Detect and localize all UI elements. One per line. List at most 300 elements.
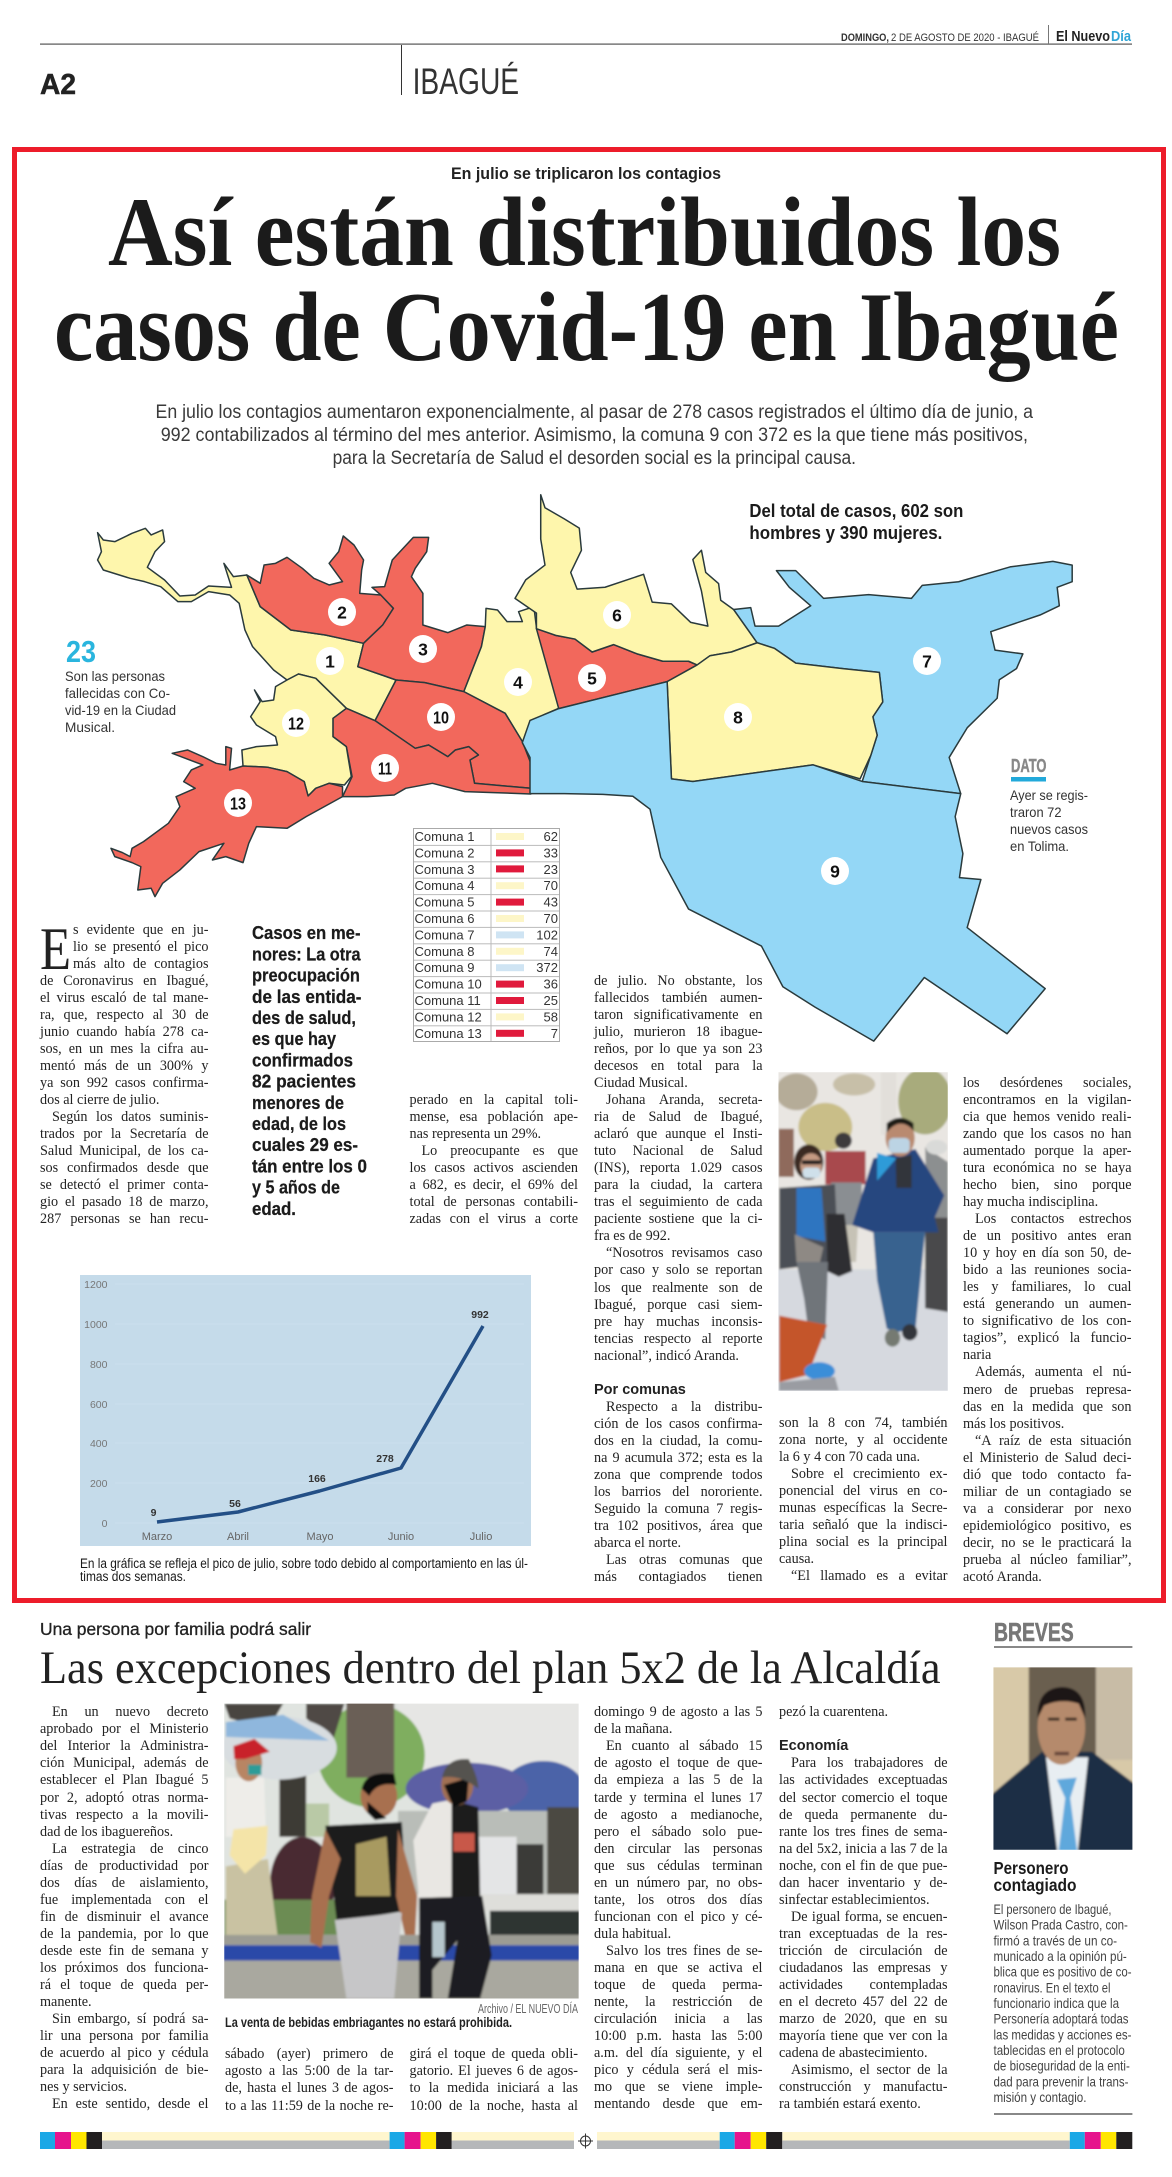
second article text: column 4: circulación inicia a las [594,2011,762,2027]
callout: dato: traron 72 [1010,804,1062,820]
comuna 4 [464,607,559,742]
panel: breves sidebar [990,1617,1136,2115]
second article text: column 1: rá el toque de queda per- [40,1977,208,1993]
second article text: column 1: por 2, adoptó otras norma- [40,1790,208,1806]
second article text: column 4: mo que se viene imple- [594,2079,762,2095]
drop cap: E [40,916,71,982]
comuna 2 [247,536,393,643]
section name: IBAGUÉ [413,61,519,102]
brief text: Personería adoptará todas [994,2011,1128,2027]
pull quote: cases in minors: de las entida- [252,986,362,1007]
article text: column 5: prueba al núcleo familiar”, [963,1552,1132,1568]
second article text: column 1: Sin embargo, sí podrá sa- [52,2011,208,2027]
second article text: column 1: manente. [40,1994,92,2010]
article text: column 4: Sobre el crecimiento ex- [791,1466,948,1482]
foreground seated person [779,1316,827,1382]
x axis labels: Marzo [142,1531,172,1543]
second article text: column 5: las actividades exceptuadas [779,1772,948,1788]
second article text: column 5: actividades contempladas [779,1977,948,1993]
data labels: 992 [471,1309,489,1321]
article text: column 3: pre hay muchas inconsis- [594,1314,762,1330]
article text: column 3: de julio. No obstante, los [594,973,762,989]
breves heading: BREVES [994,1617,1074,1647]
article text: column 4: zona norte, y al occidente [779,1432,948,1448]
second article text: column 1: lir una persona por familia [40,2028,208,2044]
second article text: column 5: del sector comercio el toque [779,1790,948,1806]
article text: column 5: los desórdenes sociales, [963,1075,1132,1091]
brief text: blica que es positivo de co- [994,1964,1132,1980]
article text: column 5: 10 y hoy en día son 50, de- [963,1245,1132,1261]
brief text: misión y contagio. [994,2089,1086,2105]
pull quote: cases in minors: y 5 años de [252,1177,340,1198]
chart caption: timas dos semanas. [80,1569,186,1584]
brief heading [994,1858,1076,1895]
callout: dato: nuevos casos [1010,821,1088,837]
row: comuna 4: 70 [544,878,558,893]
comuna 5 [536,629,697,709]
chart caption: En la gráfica se refleja el pico de julio, sobre todo debido al comportamiento en las úl- [80,1556,528,1571]
comuna 8: 8 [733,708,743,728]
line chart: monthly cases [80,1275,531,1546]
article text: column 1: sos, en un mes la cifra au- [40,1041,208,1057]
second article text: column 1: fin de disminuir el avance [40,1909,208,1925]
row: comuna 10 [414,977,558,992]
pull quote: cases in minors: edad, de los [252,1113,346,1134]
data labels [151,1309,489,1519]
second article text: column 5: construcción y manufactu- [779,2079,948,2095]
row: comuna 2: 33 [544,845,558,860]
photo caption: La venta de bebidas embriagantes no estará prohibida. [225,2015,512,2030]
article text: column 5: zando que los casos no han [963,1126,1132,1142]
article text: column 3: ria de Salud de Ibagué, [594,1109,762,1125]
article text: column 1: Según los datos suminis- [52,1109,208,1125]
y axis labels: 800 [90,1359,108,1371]
second article text: column 3: girá el toque de queda obli- [410,2046,578,2062]
comuna 2: 2 [337,602,347,622]
headline: second article: Las excepciones dentro del plan 5x2 de la Alcaldía [40,1642,941,1694]
second article text: column 1: En un nuevo decreto [52,1704,208,1720]
article text: column 3: Por comunas [594,1382,686,1398]
comuna 11: 11 [378,758,392,778]
article text: column 3: reños, por lo que ya son 23 [594,1041,762,1057]
row: comuna 13: 7 [551,1026,558,1041]
callout: dato: Ayer se regis- [1010,787,1088,803]
second article text: column 5: rante los tres fines de sema- [779,1824,948,1840]
second article text: column 4: domingo 9 de agosto a las 5 [594,1704,762,1720]
second article text: column 4 [594,1704,762,2112]
article text: column 3: ción de los casos confirma- [594,1416,762,1432]
pull quote: cases in minors: preocupación [252,965,360,986]
second article text: column 4: Salvo los tres fines de se- [606,1943,762,1959]
brief text: Wilson Prada Castro, con- [994,1917,1128,1933]
pull quote: cases in minors: Casos en me- [252,922,360,943]
article text: column 1: ya son 992 casos confirma- [40,1075,208,1091]
article text: column 3: para la ciudad, la cartera [594,1177,762,1193]
second article text: column 1: dos días de aislamiento, [40,1875,208,1891]
y axis labels: 200 [90,1478,108,1490]
article text: column 4: son la 8 con 74, también [779,1415,948,1431]
brief text: tablecidas en el protocolo [994,2042,1125,2058]
newspaper logo: Día [1111,28,1132,45]
second article text: column 4: den circular las personas [594,1841,762,1857]
row: comuna 5: Comuna 5 [414,895,474,910]
article text: column 4: taria señaló que la indisci- [779,1517,948,1533]
brief text: dad para prevenir la trans- [994,2073,1129,2089]
second article text: column 2: agosto a las 5:00 de la tar- [225,2063,394,2079]
second article text: column 1: dad de los ibaguereños. [40,1824,173,1840]
callout: deaths in city [65,634,176,735]
article text: column 4: la 6 y 4 con 70 cada una. [779,1449,920,1465]
second article text: column 1: ción Municipal, además de [40,1755,208,1771]
row: comuna 5 [414,895,558,910]
second article text: column 4: nente, la restricción de [594,1994,762,2010]
comuna 13: 13 [230,794,246,814]
brief text: de bioseguridad de la enti- [994,2058,1130,2074]
row: comuna 10: 36 [544,977,558,992]
y axis labels [84,1279,108,1530]
second article text: column 4: funcionan con el pico y cé- [594,1909,762,1925]
comuna 9 [522,682,1045,1041]
row: comuna 7 [414,927,558,942]
second article text: column 1: tivas respecto a la movili- [40,1807,208,1823]
article text: column 4: munas específicas la Secre- [779,1500,948,1516]
article text: column 3: (INS), reporta 1.029 casos [594,1160,762,1176]
data labels: 166 [308,1473,326,1485]
article text: column 4: ponencial del virus en co- [779,1483,948,1499]
article text: column 4: “El llamado es a evitar [791,1568,948,1584]
second article text: column 4: de agosto a medianoche, [594,1807,762,1823]
row: comuna 4 [414,878,558,893]
article text: column 5: acotó Aranda. [963,1569,1042,1585]
article text: column 3: más contagiados tienen [594,1569,762,1585]
second article text: column 5: tricción de circulación de [779,1943,948,1959]
article text: column 3: por caso y solo se reportan [594,1262,762,1278]
article text: column 5: mero de pruebas represa- [963,1382,1132,1398]
article text: column 2: nas representa un 29%. [410,1126,541,1142]
date line [841,31,1039,44]
row: comuna 7: Comuna 7 [414,927,474,942]
page number: A2 [40,69,76,101]
second article text: column 5: marzo de 2020, que en su [779,2011,948,2027]
chart caption [80,1556,528,1584]
brief text: municado a la opinión pú- [994,1948,1127,1964]
article text: column 5: el Ministerio de Salud deci- [963,1450,1132,1466]
article text: column 3: taron significativamente en [594,1007,762,1023]
second article text: column 4: tarde y termina el lunes 17 [594,1790,762,1806]
pull quote: cases in minors [252,922,367,1219]
second article text: column 5: Economía [779,1738,848,1754]
article text: column 5: epidemiológico positivo, es [963,1518,1132,1534]
date line: 2 DE AGOSTO DE 2020 - IBAGUÉ [891,31,1039,44]
second article text: column 1: aprobado por el Ministerio [40,1721,208,1737]
article text: column 1: mentó más de un 300% y [40,1058,208,1074]
second article text: column 5: pezó la cuarentena. [779,1704,888,1720]
second article text: column 1: de acuerdo al pico y cédula [40,2045,208,2061]
row: comuna 5: 43 [544,895,558,910]
pull quote: cases in minors: menores de [252,1092,344,1113]
second article text: column 4: tante, los otros dos días [594,1892,762,1908]
second article text: column 1: La estrategia de cinco [52,1841,208,1857]
article text: column 1: de Coronavirus en Ibagué, [40,973,208,989]
wall [220,1935,582,1945]
callout: deaths in city: vid-19 en la Ciudad [65,702,176,718]
y axis labels: 1200 [84,1279,108,1291]
article text: column 5: das en la medida que son [963,1399,1132,1415]
row: comuna 7: 102 [536,927,558,942]
title: Así están distribuidos los [108,178,1061,287]
callout: deaths in city: Musical. [65,719,115,735]
article text: column 1: s evidente que en ju- [73,922,208,938]
article text: column 5: encontramos en la vigilan- [963,1092,1132,1108]
second article text: column 5: en el decreto 457 del 22 de [779,1994,948,2010]
second article text: column 5: noche, con el fin de que pue- [779,1858,948,1874]
article text: column 2: total de personas contabili- [410,1194,578,1210]
second article text: column 1: nes y servicios. [40,2079,127,2095]
article text: column 3: nacional”, indicó Aranda. [594,1348,739,1364]
callout: dato [1010,756,1088,854]
second article text: column 4: pero el sábado solo pue- [594,1824,762,1840]
pull quote: cases in minors: es que hay [252,1028,337,1049]
second article text: column 4: En cuanto al sábado 15 [606,1738,762,1754]
footer colour registration bar [40,2132,1132,2149]
article text: column 3: tras el seguimiento de cada [594,1194,762,1210]
row: comuna 9: 372 [536,960,558,975]
callout: deaths in city: Son las personas [65,668,165,684]
article text: column 5: más los positivos. [963,1416,1064,1432]
article text: column 1: sos confirmados desde que [40,1160,208,1176]
article text: column 2: a 682, es decir, el 69% del [410,1177,578,1193]
article text: column 5 [963,1075,1132,1585]
brief heading: Personero [994,1858,1068,1878]
photo credit: Archivo / EL NUEVO DÍA [478,2001,578,2016]
comuna 12: 12 [288,714,304,734]
article text: column 5: está generando un aumen- [963,1296,1132,1312]
second article text: column 4: mana en que se activa el [594,1960,762,1976]
second article text: column 1: del Interior la Administra- [40,1738,208,1754]
article text: column 3: Las otras comunas que [606,1552,762,1568]
second article text: column 4: de la mañana. [594,1721,672,1737]
data labels: 9 [151,1507,157,1519]
second article text: column 1: de la pandemia, por lo que [40,1926,208,1942]
brief text: ronavirus. En el texto el [994,1979,1110,1995]
second article text: column 5: Asimismo, el sector de la [791,2062,948,2078]
line series [157,1326,483,1522]
second article text: column 4: da empieza a las 5 de la [594,1772,762,1788]
article text: column 3: decesos en total para la [594,1058,762,1074]
article text: column 5: decir, no se le practicará la [963,1535,1132,1551]
second article text: column 1 [40,1704,208,2112]
article text: column 1: el virus escaló de tal mane- [40,990,208,1006]
article text: column 1: 287 personas se han recu- [40,1211,208,1227]
date line: DOMINGO, [841,32,889,44]
comuna 12 [242,674,351,796]
second article text: column 2 [225,2046,394,2114]
callout: deaths in city: fallecidas con Co- [65,685,170,701]
x axis labels [142,1531,492,1543]
row: comuna 8 [414,944,558,959]
article text: column 5: va a considerar por nexo [963,1501,1132,1517]
icon: registration mark [578,2134,593,2148]
callout: deaths in city: 23 [66,634,96,669]
row: comuna 13: Comuna 13 [414,1026,482,1041]
x axis labels: Junio [388,1531,414,1543]
article text: column 3: tra 102 positivos, área que [594,1518,762,1534]
callout: dato: en Tolima. [1010,838,1069,854]
comuna 13 [111,747,343,897]
second article text: column 1: En este sentido, desde el [52,2096,208,2112]
second article text: column 5 [779,1704,948,2112]
photo: men walking in plaza [220,1700,586,2002]
kicker: second article: Una persona por familia podrá salir [40,1619,311,1639]
row: comuna 2 [414,845,558,860]
article text: column 5: de un positivo antes eran [963,1228,1132,1244]
row: comuna 6 [414,911,558,926]
article text: column 3: los que realmente son de [594,1280,762,1296]
choropleth map of comunas [98,495,1072,1041]
man with red cap [226,1778,266,1837]
brief text: firmó a través de un co- [994,1932,1117,1948]
comuna 6 [515,495,757,665]
article text: column 1: dos al cierre de julio. [40,1092,159,1108]
article text: column 2: los casos activos ascienden [410,1160,578,1176]
second article text: column 2: de, hasta el lunes 3 de agos- [225,2080,394,2096]
article text: column 5: Además, aumenta el nú- [975,1364,1132,1380]
article text: column 3 [594,973,762,1585]
row: comuna 12 [414,1009,558,1024]
y axis labels: 1000 [84,1319,108,1331]
row: comuna 1: Comuna 1 [414,829,474,844]
article text: column 3: Seguido la comuna 7 regis- [594,1501,762,1517]
article text: column 5: bido a las reuniones socia- [963,1262,1132,1278]
y axis labels: 0 [102,1518,108,1530]
pull quote: cases in minors: cuales 29 es- [252,1134,358,1155]
article text: column 2: Lo preocupante es que [422,1143,578,1159]
article text: column 3: “Nosotros revisamos caso [606,1245,762,1261]
page header [40,25,1132,102]
row: comuna 4: Comuna 4 [414,878,474,893]
second article text: column 5: sinfectar establecimientos. [779,1892,930,1908]
callout: dato: DATO [1011,756,1046,776]
second article text: column 5: ra también estará exento. [779,2096,921,2112]
comuna 9: 9 [830,862,840,882]
article text: column 5: cia que hemos venido reali- [963,1109,1132,1125]
row: comuna 1: 62 [544,829,558,844]
callout: men and women totals: Del total de casos, 602 son [749,501,963,521]
article text: column 2 [410,1092,578,1227]
article text: column 2: perado en la capital toli- [410,1092,578,1108]
article text: column 1: más alto de contagios [73,956,208,972]
comuna 3 [358,537,485,692]
row: comuna 6: Comuna 6 [414,911,474,926]
man [852,1149,944,1232]
pull quote: cases in minors: des de salud, [252,1007,356,1028]
brief text: las medidas y acciones es- [994,2026,1132,2042]
pull quote: cases in minors: 82 pacientes [252,1071,356,1092]
second article text: column 5: De igual forma, se encuen- [791,1909,948,1925]
x axis labels: Abril [227,1531,249,1543]
woman [779,1184,839,1269]
row: comuna 3 [414,862,558,877]
row: comuna 11 [414,993,558,1008]
article text: column 3: Johana Aranda, secreta- [606,1092,762,1108]
pull quote: cases in minors: tán entre los 0 [252,1155,367,1176]
article text: column 3: tencias respecto al reporte [594,1331,762,1347]
comuna 1 [98,528,396,721]
row: comuna 11: Comuna 11 [414,993,481,1008]
comuna 4: 4 [513,672,523,692]
portrait photo [990,1664,1136,1853]
article text: column 3: paciente sostiene que la ci- [594,1211,762,1227]
second article text: column 3: 10:00 de la noche, hasta al [410,2098,578,2114]
second article text: column 5: cadena de abastecimiento. [779,2045,928,2061]
newspaper logo: El Nuevo [1056,28,1110,45]
second article text: column 3 [410,2046,578,2114]
second article text: column 5: na del 5x2, inicia a las 7 de la [779,1841,948,1857]
article text: column 5: les y familiares, lo cual [963,1279,1132,1295]
brief text: El personero de Ibagué, [994,1901,1112,1917]
article text: column 3: dos en la ciudad, la comu- [594,1433,762,1449]
comuna 6: 6 [612,606,622,626]
article text: column 5: hecho bien, sino porque [963,1177,1132,1193]
article text: column 3: zona que comprende todos [594,1467,762,1483]
article text: column 3: julio, murieron 18 ibague- [594,1024,762,1040]
comuna 10: 10 [433,708,449,728]
article text: column 5: hay mucha indisciplina. [963,1194,1098,1210]
second article text: column 5: de queda permanente du- [779,1807,948,1823]
comuna 11 [333,708,531,797]
row: comuna 2: Comuna 2 [414,845,474,860]
intro text [156,402,1033,469]
table of cases by comuna [414,828,560,1042]
comuna 7 [734,561,1072,794]
kicker: En julio se triplicaron los contagios [451,164,721,183]
second article text: column 4: mentando desde que em- [594,2096,762,2112]
row: comuna 9: Comuna 9 [414,960,474,975]
second article text: column 4: dula habitual. [594,1926,671,1942]
article text: column 4: plina social es la principal [779,1534,948,1550]
article text: column 1: Salud Municipal, de los ca- [40,1143,208,1159]
second article text: column 1: días de productividad por [40,1858,208,1874]
second article text: column 5: tran exceptuadas de la res- [779,1926,948,1942]
article text: column 1: gio el pasado 18 de marzo, [40,1194,208,1210]
article text: column 3: aclaró que aunque el Insti- [594,1126,762,1142]
row: comuna 1 [414,829,558,844]
article text: column 1: lio se presentó el pico [73,939,208,955]
pull quote: cases in minors: nores: La otra [252,943,361,964]
second article text: column 5: ciudadanos las empresas y [779,1960,948,1976]
article text: column 1: ra, que, respecto al 30 de [40,1007,208,1023]
second article text: column 3: gatorio. El jueves 6 de agos- [410,2063,578,2079]
photo: couple walking with masks [775,1068,952,1394]
second article text: column 1: los próximos dos funciona- [40,1960,208,1976]
callout: men and women totals [749,501,963,543]
comuna 7: 7 [922,652,932,672]
article text: column 3: na 9 acumula 372; esta es la [594,1450,762,1466]
row: comuna 13 [414,1026,558,1041]
article text: column 1: junio cuando había 278 ca- [40,1024,208,1040]
article text: column 1: se detectó el primer conta- [40,1177,208,1193]
article text: column 3: Ciudad Musical. [594,1075,688,1091]
article text: column 5: Los contactos estrechos [975,1211,1132,1227]
row: comuna 3: Comuna 3 [414,862,474,877]
data labels: 56 [229,1498,241,1510]
article text: column 3: abarca el norte. [594,1535,681,1551]
second article text: column 4: toque de queda perma- [594,1977,762,1993]
second article text: column 4: que sus cédulas terminan [594,1858,762,1874]
article text: column 3: fallecidos también aumen- [594,990,762,1006]
intro text: para la Secretaría de Salud el desorden social es la principal causa. [333,448,856,469]
row: comuna 12: Comuna 12 [414,1009,482,1024]
